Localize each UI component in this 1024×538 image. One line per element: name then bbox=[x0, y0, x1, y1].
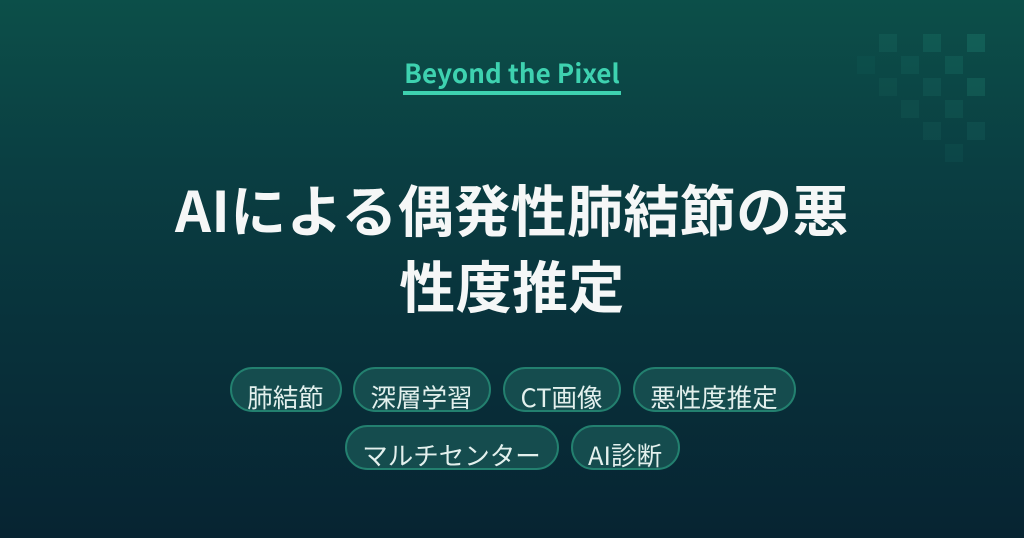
tag: マルチセンター: マルチセンター bbox=[362, 436, 541, 473]
tag: 悪性度推定: 悪性度推定 bbox=[650, 378, 778, 415]
brand label: Beyond the Pixel: Beyond the Pixel bbox=[404, 54, 620, 91]
tag: AI診断: AI診断 bbox=[588, 436, 662, 473]
tag: 肺結節 bbox=[230, 367, 342, 412]
title bbox=[174, 168, 849, 324]
tag: マルチセンター bbox=[345, 425, 559, 470]
decorative square pattern bbox=[879, 34, 985, 140]
title: 性度推定 bbox=[399, 244, 625, 324]
tag: 深層学習: 深層学習 bbox=[370, 378, 472, 415]
tag: CT画像 bbox=[503, 367, 621, 412]
tag list bbox=[230, 367, 796, 473]
title: AIによる偶発性肺結節の悪 bbox=[175, 168, 849, 249]
tag: 深層学習 bbox=[353, 367, 491, 412]
tag: CT画像: CT画像 bbox=[520, 378, 603, 415]
tag: 悪性度推定 bbox=[633, 367, 796, 412]
tag: 肺結節: 肺結節 bbox=[247, 378, 324, 415]
tag: AI診断 bbox=[571, 425, 680, 470]
